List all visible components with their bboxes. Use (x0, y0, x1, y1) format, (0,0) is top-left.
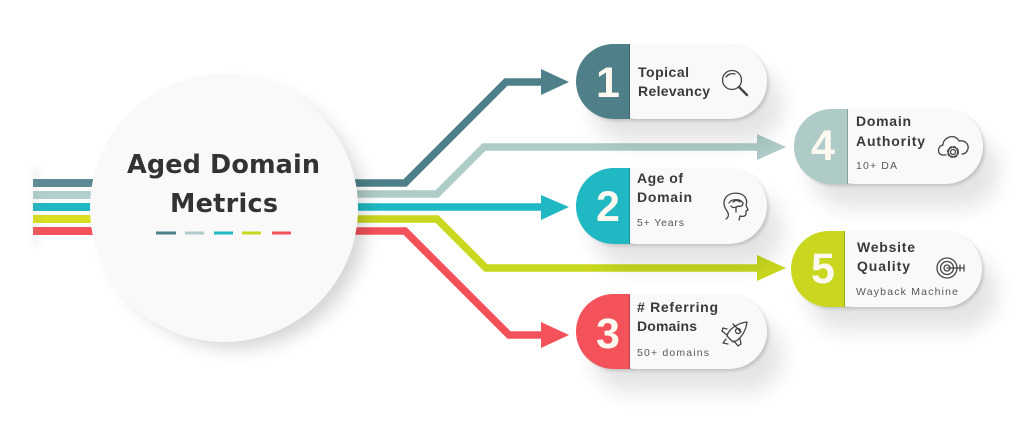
connector: pale teal to card 4 (350, 134, 786, 194)
icon: rocket (722, 322, 747, 346)
card 3: # Referring Domains: 50+ domains (637, 347, 709, 359)
connector: red to card 3 (350, 231, 569, 348)
card 4: Domain Authority: Authority (856, 133, 925, 149)
card 4: Domain Authority: Domain (856, 113, 911, 129)
card 2: Age of Domain: Domain (637, 189, 692, 205)
icon: target with arrow (937, 258, 964, 278)
card 5: Website Quality: 5 (811, 245, 835, 293)
central circle (90, 74, 366, 348)
card 4: Domain Authority (794, 109, 999, 208)
card 4: Domain Authority: 10+ DA (856, 160, 897, 172)
card 1: Topical Relevancy: Topical (638, 64, 689, 80)
card 4: Domain Authority: 4 (811, 122, 835, 170)
title: Metrics (170, 189, 278, 219)
card 2: Age of Domain: 2 (596, 183, 620, 231)
card 5: Website Quality: Quality (857, 258, 910, 274)
title (127, 150, 320, 219)
icon: magnifier (722, 70, 747, 95)
card 3: # Referring Domains: 3 (596, 310, 620, 358)
card 5: Website Quality: Wayback Machine (856, 286, 958, 298)
card 1: Topical Relevancy: 1 (596, 59, 620, 107)
card 2: Age of Domain: 5+ Years (637, 217, 684, 229)
card 1: Topical Relevancy (576, 44, 783, 143)
connector: cyan to card 2 (350, 195, 569, 220)
icon: head with brain (724, 193, 748, 220)
connector: teal to card 1 (350, 69, 569, 183)
connector: yellow-green to card 5 (350, 219, 786, 281)
card 5: Website Quality: Website (857, 239, 915, 255)
card 3: # Referring Domains: # Referring (637, 299, 718, 315)
title: Aged Domain (127, 150, 320, 180)
icon: cloud with gear (938, 137, 968, 157)
card 5: Website Quality (791, 231, 998, 331)
left input stripes (33, 168, 93, 246)
card 1: Topical Relevancy: Relevancy (638, 83, 710, 99)
card 2: Age of Domain (576, 168, 783, 268)
colour dashes (156, 232, 291, 234)
card 3: # Referring Domains (576, 294, 783, 393)
card 3: # Referring Domains: Domains (637, 318, 697, 334)
card 2: Age of Domain: Age of (637, 170, 683, 186)
